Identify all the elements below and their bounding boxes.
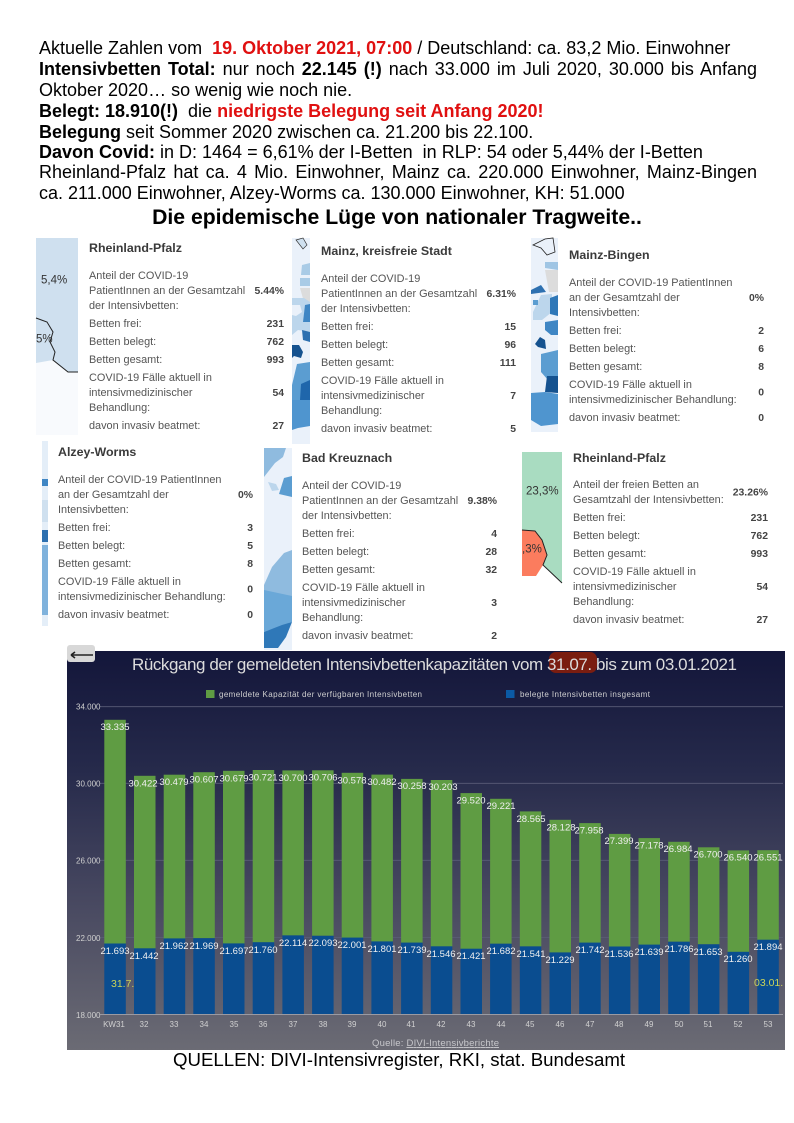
source note in chart: Quelle: DIVI-Intensivberichte	[372, 1038, 499, 1049]
panel: Bad Kreuznach: Behandlung:	[302, 612, 363, 624]
panel: Alzey-Worms	[42, 441, 253, 626]
panel: Bad Kreuznach: 4	[491, 529, 497, 540]
occupied value labels: 21.639	[634, 947, 664, 958]
occupied value labels: 21.229	[545, 955, 575, 966]
capacity value labels: 30.203	[428, 782, 458, 793]
text block: current figures: Davon Covid: in D: 1464 = 6,61% der I-Betten in RLP: 54 oder 5,44% der I-Betten	[39, 142, 703, 162]
panel: Rheinland-Pfalz free beds: 54	[756, 582, 768, 593]
panel: Rheinland-Pfalz Covid share: 54	[272, 388, 284, 399]
capacity value labels: 26.700	[693, 850, 723, 860]
blue occupied bars	[104, 935, 779, 1014]
panel: Mainz, kreisfreie Stadt: 6.31%	[487, 289, 516, 300]
capacity value labels: 26.540	[723, 852, 753, 864]
capacity value labels: 28.565	[516, 814, 546, 825]
panel: Rheinland-Pfalz free beds: 993	[751, 549, 768, 560]
panel: Alzey-Worms: COVID-19 Fälle aktuell in	[58, 576, 181, 588]
capacity value labels: 30.482	[367, 777, 397, 788]
capacity value labels: 26.551	[753, 852, 783, 864]
panel: Rheinland-Pfalz free beds: COVID-19 Fälle aktuell in	[573, 566, 696, 578]
panel: Rheinland-Pfalz free beds: Betten belegt:	[573, 530, 640, 542]
bar chart: ICU capacity	[67, 645, 785, 1050]
panel: Alzey-Worms: 0%	[238, 490, 253, 501]
occupied value labels: 21.442	[129, 951, 159, 962]
x axis labels: 41	[407, 1020, 416, 1029]
panel: Alzey-Worms: an der Gesamtzahl der	[58, 489, 169, 501]
panel: Bad Kreuznach: Betten belegt:	[302, 546, 369, 558]
panel: Mainz, kreisfreie Stadt: Betten gesamt:	[321, 357, 394, 369]
panel: Rheinland-Pfalz free beds: 762	[751, 531, 768, 542]
occupied value labels: 21.697	[219, 946, 249, 957]
date marker: 31.7.: 31.7.	[111, 978, 134, 990]
panel: Bad Kreuznach: der Intensivbetten:	[302, 510, 392, 522]
capacity value labels: 30.578	[337, 776, 367, 786]
y axis labels: 30.000	[76, 780, 101, 788]
x axis labels: 37	[289, 1020, 298, 1029]
panel: Bad Kreuznach: 32	[485, 565, 497, 576]
panel: Rheinland-Pfalz free beds: davon invasiv beatmet:	[573, 614, 684, 626]
text block: current figures: Belegt: 18.910(!) die niedrigste Belegung seit Anfang 2020!	[39, 101, 543, 121]
panel: Mainz, kreisfreie Stadt: Betten frei:	[321, 321, 374, 333]
panel: Rheinland-Pfalz Covid share: 5%	[36, 334, 53, 346]
panel: Rheinland-Pfalz Covid share: Betten frei:	[89, 318, 142, 330]
panel: Bad Kreuznach: COVID-19 Fälle aktuell in	[302, 582, 425, 594]
panel: Mainz, kreisfreie Stadt: Betten belegt:	[321, 339, 388, 351]
capacity value labels: 30.721	[248, 772, 278, 784]
panel: Mainz, kreisfreie Stadt: COVID-19 Fälle aktuell in	[321, 375, 444, 387]
x axis labels: 53	[764, 1020, 773, 1029]
panel: Mainz, kreisfreie Stadt	[292, 238, 516, 444]
occupied value labels: 21.742	[575, 945, 605, 956]
panel: Mainz-Bingen: Mainz-Bingen	[569, 248, 650, 262]
panel: Mainz-Bingen: Betten frei:	[569, 325, 622, 337]
x axis labels: 46	[556, 1020, 565, 1029]
occupied value labels: 22.001	[337, 940, 367, 951]
panel: Rheinland-Pfalz Covid share: Anteil der COVID-19	[89, 270, 188, 282]
panel: Mainz, kreisfreie Stadt: PatientInnen an der Gesamtzahl	[321, 288, 477, 300]
occupied value labels	[100, 938, 783, 966]
panel: Mainz-Bingen: intensivmedizinischer Behandlung:	[569, 394, 737, 406]
occupied value labels: 21.260	[723, 954, 753, 965]
panel: Rheinland-Pfalz free beds: Rheinland-Pfalz	[573, 451, 666, 465]
panel: Alzey-Worms: Betten belegt:	[58, 540, 125, 552]
panel: Mainz-Bingen: 0	[758, 388, 764, 399]
occupied value labels: 21.421	[456, 951, 486, 962]
capacity value labels: 30.258	[397, 781, 427, 792]
panel: Alzey-Worms: 0	[247, 585, 253, 596]
panel: Bad Kreuznach: 28	[485, 547, 497, 558]
panel: Mainz-Bingen: 8	[758, 362, 764, 373]
panel: Bad Kreuznach: Anteil der COVID-19	[302, 480, 401, 492]
x axis labels: 44	[497, 1020, 506, 1029]
x axis labels: 40	[378, 1020, 387, 1029]
x axis labels: 33	[170, 1020, 179, 1029]
capacity value labels: 30.422	[128, 778, 158, 790]
y axis labels	[76, 702, 101, 1020]
panel: Bad Kreuznach: Betten frei:	[302, 528, 355, 540]
panel: Mainz-Bingen: Betten gesamt:	[569, 361, 642, 373]
panel: Rheinland-Pfalz free beds: intensivmedizinischer	[573, 581, 677, 593]
panel: Mainz-Bingen: COVID-19 Fälle aktuell in	[569, 379, 692, 391]
x axis labels: 49	[645, 1020, 654, 1029]
panel: Bad Kreuznach: Betten gesamt:	[302, 564, 375, 576]
occupied value labels: 21.962	[159, 941, 189, 952]
panel: Bad Kreuznach	[264, 448, 497, 650]
text block: current figures: Aktuelle Zahlen vom 19. Oktober 2021, 07:00 / Deutschland: ca. 83,2 Mio. Einwohner	[39, 38, 730, 58]
panel: Mainz, kreisfreie Stadt: 96	[504, 340, 516, 351]
panel: Alzey-Worms: davon invasiv beatmet:	[58, 609, 169, 621]
capacity value labels: 30.706	[308, 772, 338, 784]
x axis labels: 51	[704, 1020, 713, 1029]
panel: Mainz-Bingen	[531, 238, 764, 432]
x axis labels: 32	[140, 1020, 149, 1029]
panel: Rheinland-Pfalz Covid share: PatientInnen an der Gesamtzahl	[89, 285, 245, 297]
panel: Rheinland-Pfalz Covid share: 231	[267, 319, 284, 330]
x axis labels: 42	[437, 1020, 446, 1029]
panel: Mainz, kreisfreie Stadt: 7	[510, 391, 516, 402]
panel: Mainz, kreisfreie Stadt: intensivmedizinischer	[321, 390, 425, 402]
occupied value labels: 21.801	[367, 944, 397, 955]
x axis labels: 39	[348, 1020, 357, 1029]
capacity value labels: 30.679	[219, 774, 249, 784]
x axis labels: 47	[586, 1020, 595, 1029]
panel: Bad Kreuznach: 2	[491, 631, 497, 642]
panel: Bad Kreuznach: davon invasiv beatmet:	[302, 630, 413, 642]
panel: Alzey-Worms: 8	[247, 559, 253, 570]
panel: Mainz, kreisfreie Stadt: der Intensivbetten:	[321, 303, 411, 315]
panel: Bad Kreuznach: 3	[491, 598, 497, 609]
panel: Mainz, kreisfreie Stadt: 5	[510, 424, 516, 435]
occupied value labels: 21.760	[248, 945, 278, 956]
panel: Mainz-Bingen: 2	[758, 326, 764, 337]
text block: current figures: ca. 211.000 Einwohner, Alzey-Worms ca. 130.000 Einwohner, KH: 51.000	[39, 183, 625, 203]
panel: Rheinland-Pfalz Covid share: der Intensivbetten:	[89, 300, 179, 312]
x axis labels: KW31	[103, 1020, 125, 1029]
occupied value labels: 21.546	[426, 949, 456, 960]
panel: Rheinland-Pfalz Covid share: Betten gesamt:	[89, 354, 162, 366]
x axis labels: 45	[526, 1020, 535, 1029]
occupied value labels: 21.653	[693, 947, 723, 958]
panel: Bad Kreuznach: Bad Kreuznach	[302, 451, 392, 465]
capacity value labels: 30.607	[189, 774, 219, 786]
panel: Mainz, kreisfreie Stadt: Mainz, kreisfreie Stadt	[321, 244, 452, 258]
panel: Rheinland-Pfalz free beds: Gesamtzahl der Intensivbetten:	[573, 494, 724, 506]
green capacity bars	[104, 720, 779, 953]
panel: Alzey-Worms: 0	[247, 610, 253, 621]
occupied value labels: 21.541	[516, 949, 546, 960]
capacity value labels: 27.399	[604, 836, 634, 847]
panel: Rheinland-Pfalz Covid share: 5.44%	[255, 286, 284, 297]
panel: Mainz-Bingen: davon invasiv beatmet:	[569, 412, 680, 424]
y axis labels: 22.000	[76, 934, 101, 943]
panel: Rheinland-Pfalz free beds: 23.26%	[733, 488, 768, 499]
footer: sources: QUELLEN: DIVI-Intensivregister, RKI, stat. Bundesamt	[173, 1049, 625, 1070]
y axis labels: 34.000	[76, 702, 101, 712]
legend: gemeldete Kapazität der verfügbaren Intensivbetten	[219, 690, 422, 699]
panel: Mainz-Bingen: Intensivbetten:	[569, 307, 640, 319]
panel: Mainz-Bingen: 0%	[749, 293, 764, 304]
panel: Mainz-Bingen: 6	[758, 344, 764, 355]
text block: current figures: Belegung seit Sommer 2020 zwischen ca. 21.200 bis 22.100.	[39, 122, 533, 142]
y axis labels: 18.000	[76, 1011, 101, 1020]
panel: Alzey-Worms: intensivmedizinischer Behandlung:	[58, 591, 226, 603]
occupied value labels: 21.969	[189, 941, 219, 952]
icon: back button	[67, 645, 95, 662]
panel: Alzey-Worms: Betten gesamt:	[58, 558, 131, 570]
panel: Rheinland-Pfalz Covid share: davon invasiv beatmet:	[89, 420, 200, 432]
panel: Rheinland-Pfalz Covid share: COVID-19 Fälle aktuell in	[89, 372, 212, 384]
x axis labels: 48	[615, 1020, 624, 1029]
capacity value labels: 26.984	[663, 844, 693, 855]
capacity value labels: 27.178	[634, 840, 664, 852]
panel: Mainz, kreisfreie Stadt: Behandlung:	[321, 405, 382, 417]
x axis labels	[103, 1020, 773, 1029]
panel: Rheinland-Pfalz free beds: Betten gesamt:	[573, 548, 646, 560]
x axis labels: 36	[259, 1020, 268, 1029]
text block: current figures: Rheinland-Pfalz hat ca. 4 Mio. Einwohner, Mainz ca. 220.000 Einwohner, Mainz-Bingen	[39, 162, 757, 182]
panel: Alzey-Worms: Alzey-Worms	[58, 445, 136, 459]
capacity value labels: 30.479	[159, 777, 189, 788]
panel: Rheinland-Pfalz Covid share	[36, 238, 284, 435]
capacity value labels: 33.335	[100, 722, 130, 733]
occupied value labels: 21.786	[664, 944, 694, 955]
panel: Mainz, kreisfreie Stadt: davon invasiv beatmet:	[321, 423, 432, 435]
panel: Bad Kreuznach: PatientInnen an der Gesamtzahl	[302, 495, 458, 507]
chart title: Rückgang der gemeldeten Intensivbettenkapazitäten vom 31.07. bis zum 03.01.2021	[132, 655, 737, 674]
occupied value labels: 22.114	[279, 938, 307, 949]
panel: Rheinland-Pfalz free beds: Betten frei:	[573, 512, 626, 524]
panel: Rheinland-Pfalz Covid share: Behandlung:	[89, 402, 150, 414]
panel: Rheinland-Pfalz Covid share: intensivmedizinischer	[89, 387, 193, 399]
occupied value labels: 21.536	[604, 949, 634, 960]
legend: belegte Intensivbetten insgesamt	[520, 690, 651, 699]
panel: Rheinland-Pfalz free beds	[522, 451, 768, 626]
legend	[206, 690, 651, 699]
panel: Rheinland-Pfalz Covid share: Betten belegt:	[89, 336, 156, 348]
capacity value labels: 29.221	[486, 801, 516, 812]
text block: current figures	[39, 38, 757, 203]
date marker: 03.01.: 03.01.	[754, 977, 783, 989]
capacity value labels: 27.958	[574, 826, 604, 836]
x axis labels: 35	[230, 1020, 239, 1029]
occupied value labels: 21.682	[486, 946, 516, 957]
panel: Mainz-Bingen: an der Gesamtzahl der	[569, 292, 680, 304]
panel: Rheinland-Pfalz Covid share: Rheinland-Pfalz	[89, 241, 182, 255]
panel: Mainz-Bingen: 0	[758, 413, 764, 424]
occupied value labels: 22.093	[308, 938, 338, 949]
x axis labels: 52	[734, 1020, 743, 1029]
capacity value labels: 28.128	[546, 822, 576, 834]
text block: current figures: Oktober 2020… so wenig wie noch nie.	[39, 80, 352, 100]
y axis labels: 26.000	[76, 856, 101, 866]
occupied value labels: 21.894	[753, 942, 783, 953]
occupied value labels: 21.739	[397, 945, 427, 956]
panel: Alzey-Worms: Anteil der COVID-19 PatientInnen	[58, 474, 221, 486]
panel: Rheinland-Pfalz Covid share: 762	[267, 337, 284, 348]
capacity value labels: 29.520	[456, 796, 486, 806]
panel: Alzey-Worms: 3	[247, 523, 253, 534]
panel: Rheinland-Pfalz free beds: ,3%	[522, 544, 542, 556]
panel: Rheinland-Pfalz Covid share: 5,4%	[41, 275, 67, 287]
capacity value labels	[100, 722, 783, 864]
x axis labels: 50	[675, 1020, 684, 1029]
panel: Mainz, kreisfreie Stadt: 15	[504, 322, 516, 333]
panel: Alzey-Worms: Betten frei:	[58, 522, 111, 534]
panel: Rheinland-Pfalz Covid share: 993	[267, 355, 284, 366]
panel: Mainz-Bingen: Betten belegt:	[569, 343, 636, 355]
panel: Mainz, kreisfreie Stadt: Anteil der COVID-19	[321, 273, 420, 285]
panel: Bad Kreuznach: 9.38%	[468, 496, 497, 507]
heading: Die epidemische Lüge von nationaler Tragweite..	[152, 206, 642, 229]
occupied value labels: 21.693	[100, 946, 130, 957]
capacity value labels: 30.700	[278, 773, 308, 784]
text block: current figures: Intensivbetten Total: nur noch 22.145 (!) nach 33.000 im Juli 2020, 30.000 bis Anfang	[39, 59, 757, 79]
x axis labels: 38	[319, 1020, 328, 1029]
panel: Alzey-Worms: 5	[247, 541, 253, 552]
panel: Rheinland-Pfalz free beds: 27	[756, 615, 768, 626]
panel: Mainz-Bingen: Anteil der COVID-19 PatientInnen	[569, 277, 732, 289]
panel: Alzey-Worms: Intensivbetten:	[58, 504, 129, 516]
x axis labels: 43	[467, 1020, 476, 1029]
panel: Bad Kreuznach: intensivmedizinischer	[302, 597, 406, 609]
panel: Rheinland-Pfalz free beds: Anteil der freien Betten an	[573, 479, 699, 491]
x axis labels: 34	[200, 1020, 209, 1029]
panel: Rheinland-Pfalz Covid share: 27	[272, 421, 284, 432]
panel: Rheinland-Pfalz free beds: 23,3%	[526, 486, 559, 498]
panel: Rheinland-Pfalz free beds: 231	[751, 513, 768, 524]
panel: Rheinland-Pfalz free beds: Behandlung:	[573, 596, 634, 608]
panel: Mainz, kreisfreie Stadt: 111	[500, 358, 516, 369]
